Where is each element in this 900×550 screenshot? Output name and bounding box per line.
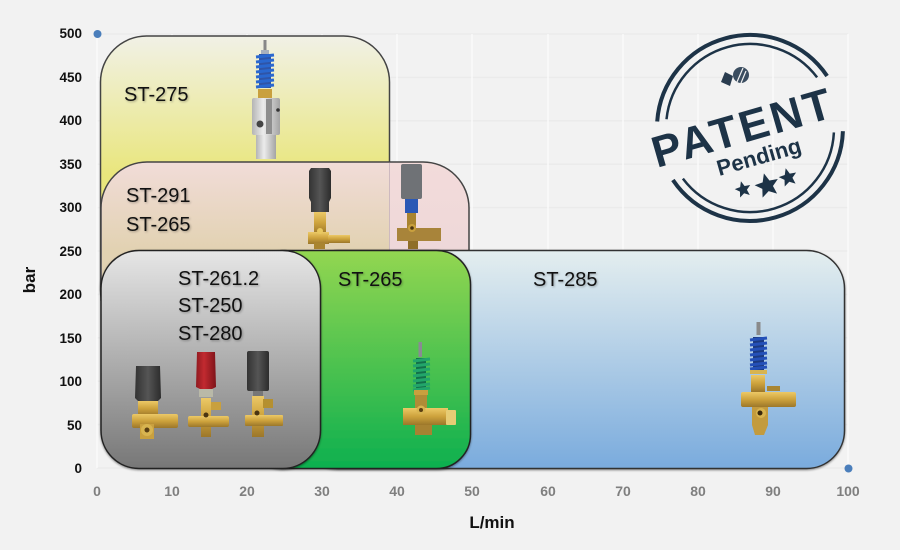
- icon: ST-285 blue spring valve: [741, 322, 796, 435]
- y axis numbers: 400: [59, 113, 82, 128]
- x axis numbers: 90: [765, 483, 781, 499]
- label: ST-280: ST-280: [178, 323, 242, 345]
- stamp outer ring top: [657, 35, 827, 121]
- label: ST-291: ST-291: [126, 185, 190, 207]
- x axis numbers: 0: [93, 483, 101, 499]
- icon: ST-265 green spring valve: [403, 342, 456, 435]
- range: ST-261.2 ST-250 ST-280 grey: [101, 250, 320, 468]
- stamp inner ring top: [666, 44, 817, 119]
- stamp inner ring bottom: [683, 132, 834, 212]
- y axis numbers: 150: [59, 331, 82, 346]
- x axis numbers: 20: [239, 483, 255, 499]
- stamp: patent pending: [646, 35, 843, 221]
- x axis numbers: 50: [464, 483, 480, 499]
- label: ST-275: ST-275: [124, 84, 188, 106]
- x axis title: L/min: [469, 513, 515, 532]
- icon: ST-265 grey knob valve: [397, 164, 441, 249]
- x axis numbers: 80: [690, 483, 706, 499]
- icon: ST-275 steel valve: [252, 40, 280, 159]
- y axis numbers: [59, 26, 82, 476]
- stamp heading PATENT: PATENT: [646, 79, 840, 177]
- y axis numbers: 50: [67, 418, 82, 433]
- label: ST-261.2: ST-261.2: [178, 268, 259, 290]
- x axis numbers: 60: [540, 483, 556, 499]
- x axis numbers: [93, 483, 860, 499]
- x axis numbers: 30: [314, 483, 330, 499]
- stamp subheading Pending: Pending: [714, 133, 804, 181]
- x axis numbers: 40: [389, 483, 405, 499]
- label: ST-265 green: ST-265: [338, 269, 402, 291]
- y axis numbers: 0: [74, 461, 82, 476]
- y axis numbers: 100: [59, 374, 82, 389]
- y axis numbers: 500: [59, 26, 82, 41]
- icon: ST-261.2 black knob valve: [132, 366, 178, 439]
- y axis title: bar: [20, 266, 39, 293]
- x axis numbers: 70: [615, 483, 631, 499]
- stamp stars: [733, 166, 799, 199]
- icon: ST-250 red knob valve: [188, 352, 229, 437]
- marker: bottom-right dot: [844, 464, 852, 472]
- x axis numbers: 100: [836, 483, 860, 499]
- range: ST-265 green: [250, 250, 470, 468]
- icon: ST-291 valve: [308, 168, 350, 249]
- label: ST-250: ST-250: [178, 295, 242, 317]
- y axis numbers: 250: [59, 244, 82, 259]
- stamp outer ring bottom: [673, 131, 843, 221]
- label: ST-285: ST-285: [533, 269, 597, 291]
- y axis numbers: 200: [59, 287, 82, 302]
- range: ST-285 blue: [300, 250, 844, 468]
- y axis numbers: 350: [59, 157, 82, 172]
- y axis numbers: 450: [59, 70, 82, 85]
- stamp logo: [721, 67, 749, 86]
- y axis numbers: 300: [59, 200, 82, 215]
- label: ST-265 pink: ST-265: [126, 214, 190, 236]
- plot grid: [97, 34, 848, 468]
- marker: top-left dot: [94, 30, 102, 38]
- range: ST-275 yellow: [100, 36, 390, 336]
- icon: ST-280 black knob valve: [245, 351, 283, 437]
- range: ST-291 ST-265 pink: [101, 162, 469, 300]
- x axis numbers: 10: [164, 483, 180, 499]
